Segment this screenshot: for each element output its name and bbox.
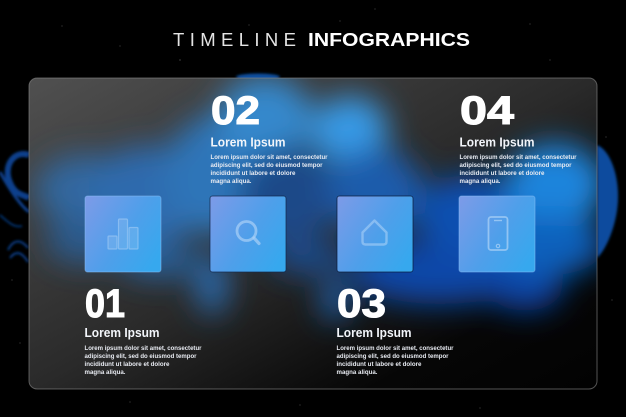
card 4: phone icon (459, 196, 535, 272)
step 03 text: Lorem Ipsum (336, 325, 412, 340)
step 04 text: adipiscing elit, sed do eiusmod tempor (460, 162, 572, 169)
step 02 text: adipiscing elit, sed do eiusmod tempor (210, 162, 323, 169)
card 1: bar chart icon (85, 196, 161, 272)
step 02 text: Lorem ipsum dolor sit amet, consectetur (210, 154, 328, 161)
glass panel (29, 76, 605, 389)
step 01 text: 01 (85, 282, 125, 326)
title (173, 29, 470, 50)
step 03 text (336, 282, 454, 376)
outer smoke: left (0, 154, 29, 262)
step 04 text: magna aliqua. (460, 178, 501, 185)
step 01 text: Lorem ipsum dolor sit amet, consectetur (84, 345, 202, 352)
outer smoke: right (597, 145, 618, 258)
title: TIMELINE (173, 29, 296, 50)
step 02 text: magna aliqua. (210, 178, 252, 185)
step 01 text: incididunt ut labore et dolore (84, 361, 170, 368)
icon: house (362, 220, 386, 244)
step 04 text: incididunt ut labore et dolore (460, 170, 545, 177)
outer smoke: top (236, 74, 280, 80)
step 03 text: 03 (337, 282, 386, 326)
step 01 text (84, 282, 202, 376)
card 2: search icon (210, 196, 286, 272)
icon: magnifier (237, 222, 259, 244)
step 03 text: adipiscing elit, sed do eiusmod tempor (336, 353, 449, 360)
step 01 text: magna aliqua. (84, 369, 126, 376)
step 04 text (460, 89, 577, 185)
card 3: home icon (337, 196, 413, 272)
icon: bar chart (108, 219, 138, 249)
step 01 text: Lorem Ipsum (84, 325, 160, 340)
icon: smartphone (488, 217, 508, 250)
panel outline (29, 78, 597, 389)
step 03 text: incididunt ut labore et dolore (336, 361, 422, 368)
step 04 text: Lorem ipsum dolor sit amet, consectetur (460, 154, 577, 161)
step 03 text: Lorem ipsum dolor sit amet, consectetur (336, 345, 454, 352)
step 02 text: incididunt ut labore et dolore (210, 170, 296, 177)
step 04 text: 04 (460, 89, 515, 133)
step 01 text: adipiscing elit, sed do eiusmod tempor (84, 353, 197, 360)
step 03 text: magna aliqua. (336, 369, 378, 376)
step 02 text (210, 89, 328, 185)
blurred smoke cloud (35, 76, 605, 320)
step 02 text: 02 (211, 89, 260, 133)
title: INFOGRAPHICS (308, 29, 470, 50)
step 02 text: Lorem Ipsum (210, 134, 286, 150)
step 04 text: Lorem Ipsum (460, 134, 534, 150)
